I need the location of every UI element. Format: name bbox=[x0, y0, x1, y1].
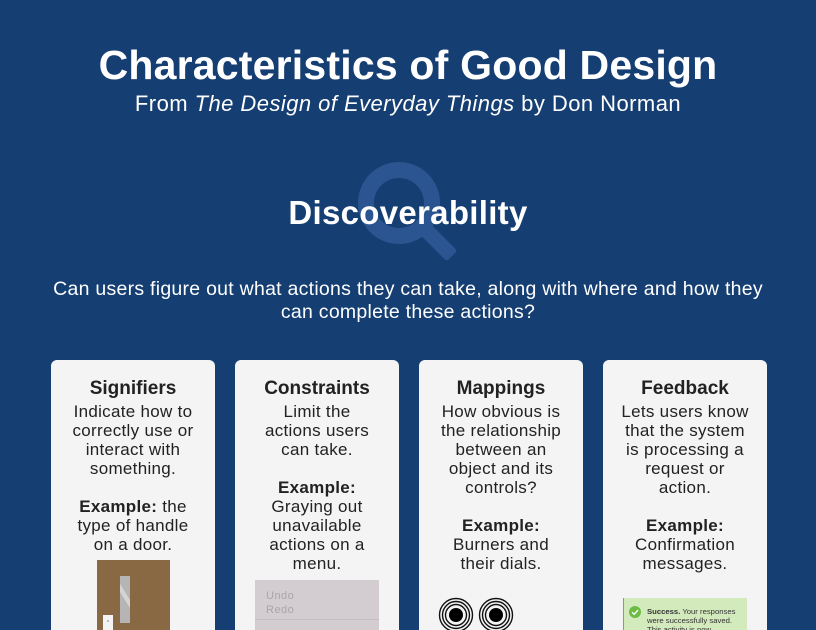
text: mappings example: their dials. bbox=[460, 554, 542, 573]
text: feedback description: that the system bbox=[625, 421, 745, 440]
text: mappings example bbox=[453, 516, 549, 573]
text: signifiers description: correctly use or bbox=[72, 421, 194, 440]
intro text bbox=[53, 278, 763, 323]
text: feedback description: is processing a bbox=[626, 440, 744, 459]
text: feedback example: Example: bbox=[646, 516, 724, 535]
text: constraints description: actions users bbox=[265, 421, 369, 440]
text: feedback description: Lets users know bbox=[621, 402, 749, 421]
section heading: Discoverability bbox=[288, 194, 528, 231]
text: signifiers description bbox=[72, 402, 194, 478]
text: constraints description: can take. bbox=[281, 440, 353, 459]
text: constraints description bbox=[265, 402, 369, 459]
title: Characteristics of Good Design bbox=[99, 42, 717, 88]
heading: feedback: Feedback bbox=[641, 378, 729, 399]
text: mappings example: Example: bbox=[462, 516, 540, 535]
text: feedback description: request or bbox=[645, 459, 725, 478]
text: constraints description: Limit the bbox=[284, 402, 350, 421]
image: grayed-out menu bbox=[255, 580, 379, 630]
icon: door with handle bbox=[97, 560, 170, 630]
panel: signifiers bbox=[51, 360, 215, 630]
text: signifiers example: Example: the bbox=[79, 497, 187, 516]
panel: mappings bbox=[419, 360, 583, 630]
text: mappings description: controls? bbox=[465, 478, 537, 497]
text: signifiers example: on a door. bbox=[94, 535, 172, 554]
image: success message bbox=[623, 598, 747, 630]
text: mappings description: between an bbox=[456, 440, 546, 459]
text: constraints example: actions on a bbox=[269, 535, 365, 554]
text: constraints example: menu. bbox=[293, 554, 341, 573]
intro text: Can users figure out what actions they can take, along with where and how they bbox=[53, 278, 763, 300]
text: feedback description bbox=[621, 402, 749, 497]
image: grayed-out menu: Redo bbox=[266, 604, 294, 616]
text: mappings description: object and its bbox=[449, 459, 553, 478]
panel: feedback bbox=[603, 360, 767, 630]
heading: constraints: Constraints bbox=[264, 378, 370, 399]
text: feedback description: action. bbox=[659, 478, 711, 497]
icon: stove burners bbox=[438, 598, 514, 630]
text: signifiers description: Indicate how to bbox=[74, 402, 192, 421]
text: feedback example bbox=[635, 516, 735, 573]
heading: signifiers: Signifiers bbox=[90, 378, 176, 399]
text: constraints example: unavailable bbox=[272, 516, 362, 535]
text: signifiers description: interact with bbox=[86, 440, 180, 459]
text: mappings description: the relationship bbox=[441, 421, 561, 440]
image: grayed-out menu: Undo bbox=[266, 590, 294, 602]
image: success message: Success. Your responses bbox=[647, 607, 735, 616]
text: constraints example: Graying out bbox=[271, 497, 363, 516]
icon: check mark bbox=[629, 606, 641, 618]
heading: mappings: Mappings bbox=[457, 378, 545, 399]
text: constraints example: Example: bbox=[278, 478, 356, 497]
text: mappings example: Burners and bbox=[453, 535, 549, 554]
image: success message: were successfully saved. bbox=[647, 616, 732, 625]
text: signifiers example: type of handle bbox=[77, 516, 188, 535]
text: feedback example: messages. bbox=[643, 554, 727, 573]
text: mappings description: How obvious is bbox=[442, 402, 560, 421]
text: signifiers example bbox=[77, 497, 188, 554]
text: signifiers description: something. bbox=[90, 459, 176, 478]
icon: magnifying glass bbox=[358, 162, 456, 260]
intro text: can complete these actions? bbox=[281, 301, 535, 323]
subtitle: From The Design of Everyday Things by Don Norman bbox=[135, 91, 681, 116]
panel: constraints bbox=[235, 360, 399, 630]
text: mappings description bbox=[441, 402, 561, 497]
text: constraints example bbox=[269, 478, 365, 573]
text: feedback example: Confirmation bbox=[635, 535, 735, 554]
